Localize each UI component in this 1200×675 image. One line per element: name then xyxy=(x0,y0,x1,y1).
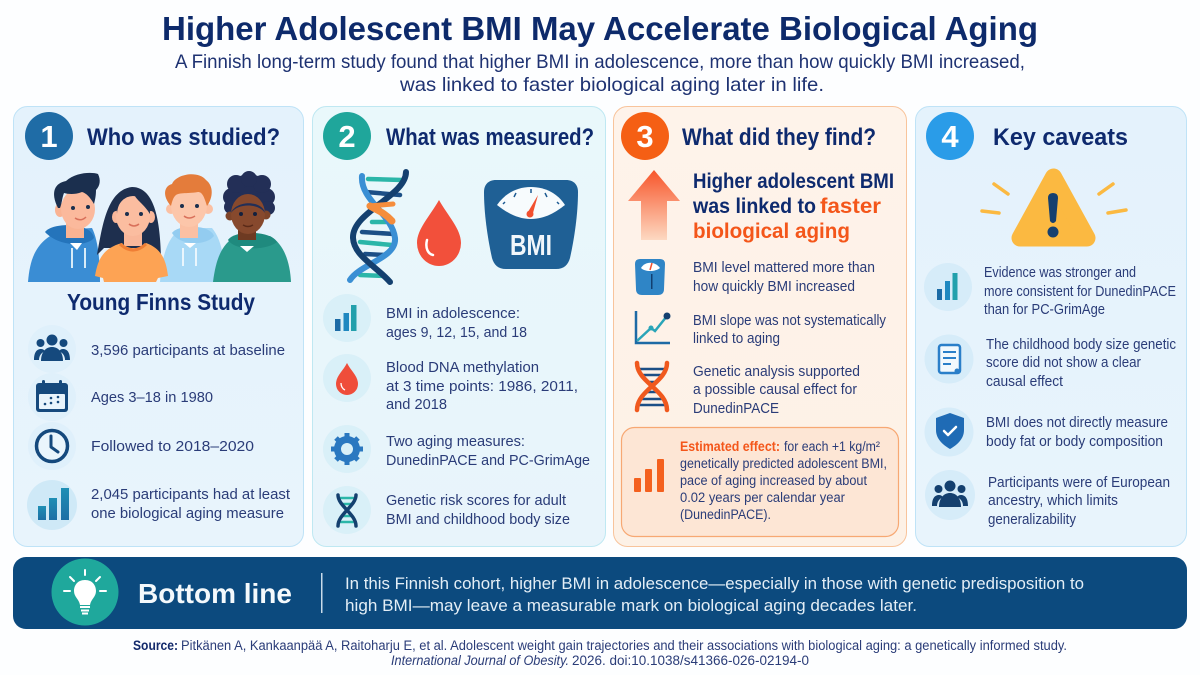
text: genetic analysis: a possible causal effect for xyxy=(693,382,857,398)
badge 3 xyxy=(621,112,669,160)
text: evidence: more consistent for DunedinPACE xyxy=(984,284,1176,300)
callout text: (DunedinPACE). xyxy=(680,507,771,522)
callout: estimated effect xyxy=(622,428,898,536)
source citation: Pitkänen A, Kankaanpää A, Raitoharju E, et al. Adolescent weight gain trajectories and their associations with biological aging: a genetically informed study. xyxy=(181,638,1067,653)
text: genetic risk scores: BMI and childhood body size xyxy=(386,512,570,528)
icon: up arrow xyxy=(628,170,680,240)
key finding statement: faster xyxy=(820,194,882,218)
subtitle: was linked to faster biological aging later in life. xyxy=(399,74,824,96)
text: ancestry: generalizability xyxy=(988,512,1077,528)
callout text: genetically predicted adolescent BMI, xyxy=(680,456,887,471)
key finding statement: was linked to xyxy=(692,194,816,218)
illustration: four young people xyxy=(28,171,291,282)
panel: what was measured xyxy=(312,106,606,546)
badge 2 xyxy=(323,112,371,160)
icon: drop in circle xyxy=(323,354,371,402)
source citation: Source: xyxy=(133,638,178,653)
badge 1 xyxy=(25,112,73,160)
icon: shield xyxy=(924,408,974,456)
text: ages: Ages 3–18 in 1980 xyxy=(91,390,213,406)
text: aging measures: DunedinPACE and PC-GrimAge xyxy=(386,453,590,469)
key finding statement: Higher adolescent BMI xyxy=(693,169,894,193)
text: evidence: Evidence was stronger and xyxy=(984,265,1136,281)
callout text: for each +1 kg/m² xyxy=(784,439,880,454)
text: aging measure count xyxy=(91,487,290,522)
source citation: 2026. doi:10.1038/s41366-026-02194-0 xyxy=(572,653,809,668)
heading: who was studied: Who was studied? xyxy=(87,124,280,151)
icon: bars xyxy=(924,263,972,311)
person: redhead in light blue hoodie xyxy=(160,174,226,282)
heading: what did they find: What did they find? xyxy=(682,124,876,151)
icon: clock xyxy=(28,422,76,470)
text: aging measure count: 2,045 participants had at least xyxy=(91,487,290,503)
icon: small bar chart xyxy=(323,294,371,342)
text: BMI in adolescence: ages 9, 12, 15, and 18 xyxy=(386,325,527,341)
text: genetic risk scores: Genetic risk scores for adult xyxy=(386,493,566,509)
text: ancestry xyxy=(988,475,1170,528)
text: DNA methylation: Blood DNA methylation xyxy=(386,360,539,376)
badge 4: 4 xyxy=(941,119,959,154)
key finding statement: biological aging xyxy=(693,219,850,243)
badge 2: 2 xyxy=(338,119,356,154)
icon: calendar xyxy=(28,373,76,421)
source citation xyxy=(133,638,1067,668)
bottom line text xyxy=(345,575,1084,615)
subtitle xyxy=(175,51,1025,96)
icon: group xyxy=(925,470,975,520)
text: genetic score: causal effect xyxy=(986,374,1063,390)
text: genetic score: The childhood body size genetic xyxy=(986,337,1176,353)
callout text xyxy=(680,439,887,522)
subheading: Young Finns Study: Young Finns Study xyxy=(67,289,255,315)
text: BMI level xyxy=(693,260,875,295)
heading: Bottom line: Bottom line xyxy=(138,578,292,609)
icon: warning triangle xyxy=(982,177,1126,238)
text: BMI limitation: BMI does not directly measure xyxy=(986,415,1168,431)
text: BMI slope xyxy=(693,313,887,347)
text: BMI level: BMI level mattered more than xyxy=(693,260,875,276)
text: DNA methylation: and 2018 xyxy=(386,397,447,413)
panel: key caveats xyxy=(916,106,1186,546)
text: evidence: than for PC-GrimAge xyxy=(984,302,1105,318)
text: DNA methylation: at 3 time points: 1986, 2011, xyxy=(386,379,578,395)
icon: document xyxy=(924,334,974,384)
source citation: International Journal of Obesity. xyxy=(391,653,569,668)
icon: BMI scale xyxy=(484,180,578,269)
text: participants: 3,596 participants at baseline xyxy=(91,343,285,359)
text: follow-up: Followed to 2018–2020 xyxy=(91,439,254,455)
person: girl in orange shirt xyxy=(95,187,168,282)
icon: small DNA xyxy=(323,486,371,534)
text: BMI in adolescence: BMI in adolescence: xyxy=(386,306,520,322)
key finding statement xyxy=(692,169,894,243)
text: genetic analysis: Genetic analysis supported xyxy=(693,364,860,380)
heading: what was measured: What was measured? xyxy=(386,124,594,151)
callout text: pace of aging increased by about xyxy=(680,473,867,488)
text: ancestry: ancestry, which limits xyxy=(988,493,1118,509)
text: genetic analysis: DunedinPACE xyxy=(693,401,779,417)
icon: BMI scale: BMI xyxy=(510,230,552,262)
text: aging measures xyxy=(386,434,590,469)
text: DNA methylation xyxy=(386,360,578,413)
text: BMI limitation xyxy=(986,415,1168,450)
badge 1: 1 xyxy=(40,119,58,154)
icon: orange bars xyxy=(634,459,664,492)
icon: blood drop xyxy=(417,200,461,266)
subtitle: A Finnish long-term study found that higher BMI in adolescence, more than how quickly BMI increased, xyxy=(175,51,1025,73)
heading: key caveats: Key caveats xyxy=(993,124,1128,151)
title: Higher Adolescent BMI May Accelerate Biological Aging xyxy=(162,10,1038,47)
icon: DNA helix xyxy=(350,172,406,282)
icon: people xyxy=(28,325,76,373)
text: BMI limitation: body fat or body composition xyxy=(986,434,1163,450)
panel: what did they find xyxy=(614,106,906,546)
text: BMI slope: linked to aging xyxy=(693,331,780,347)
person: boy in blue hoodie xyxy=(28,173,100,282)
text: genetic score: score did not show a clear xyxy=(986,355,1141,371)
icon: scale xyxy=(635,259,665,295)
text: genetic score xyxy=(986,337,1176,390)
text: ancestry: Participants were of European xyxy=(988,475,1170,491)
text: BMI level: how quickly BMI increased xyxy=(693,279,855,295)
callout text: 0.02 years per calendar year xyxy=(680,490,845,505)
badge 4 xyxy=(926,112,974,160)
panel: who was studied xyxy=(14,106,304,546)
bottom line text: high BMI—may leave a measurable mark on biological aging decades later. xyxy=(345,597,917,615)
icon: orange DNA xyxy=(637,363,667,410)
text: BMI slope: BMI slope was not systematically xyxy=(693,313,887,329)
banner: bottom line xyxy=(13,557,1187,629)
icon: line chart xyxy=(636,311,670,343)
bottom line text: In this Finnish cohort, higher BMI in adolescence—especially in those with genetic predisposition to xyxy=(345,575,1084,593)
icon: light bulb xyxy=(52,558,118,626)
text: genetic analysis xyxy=(693,364,860,417)
text: aging measure count: one biological aging measure xyxy=(91,506,284,522)
icon: bar chart xyxy=(27,480,77,530)
text: genetic risk scores xyxy=(386,493,570,528)
callout text: Estimated effect: xyxy=(680,439,780,454)
text: BMI in adolescence xyxy=(386,306,527,341)
badge 3: 3 xyxy=(636,119,654,154)
text: evidence xyxy=(984,265,1176,318)
person: boy in teal hoodie xyxy=(213,171,291,282)
icon: gear xyxy=(323,425,371,473)
text: aging measures: Two aging measures: xyxy=(386,434,525,450)
